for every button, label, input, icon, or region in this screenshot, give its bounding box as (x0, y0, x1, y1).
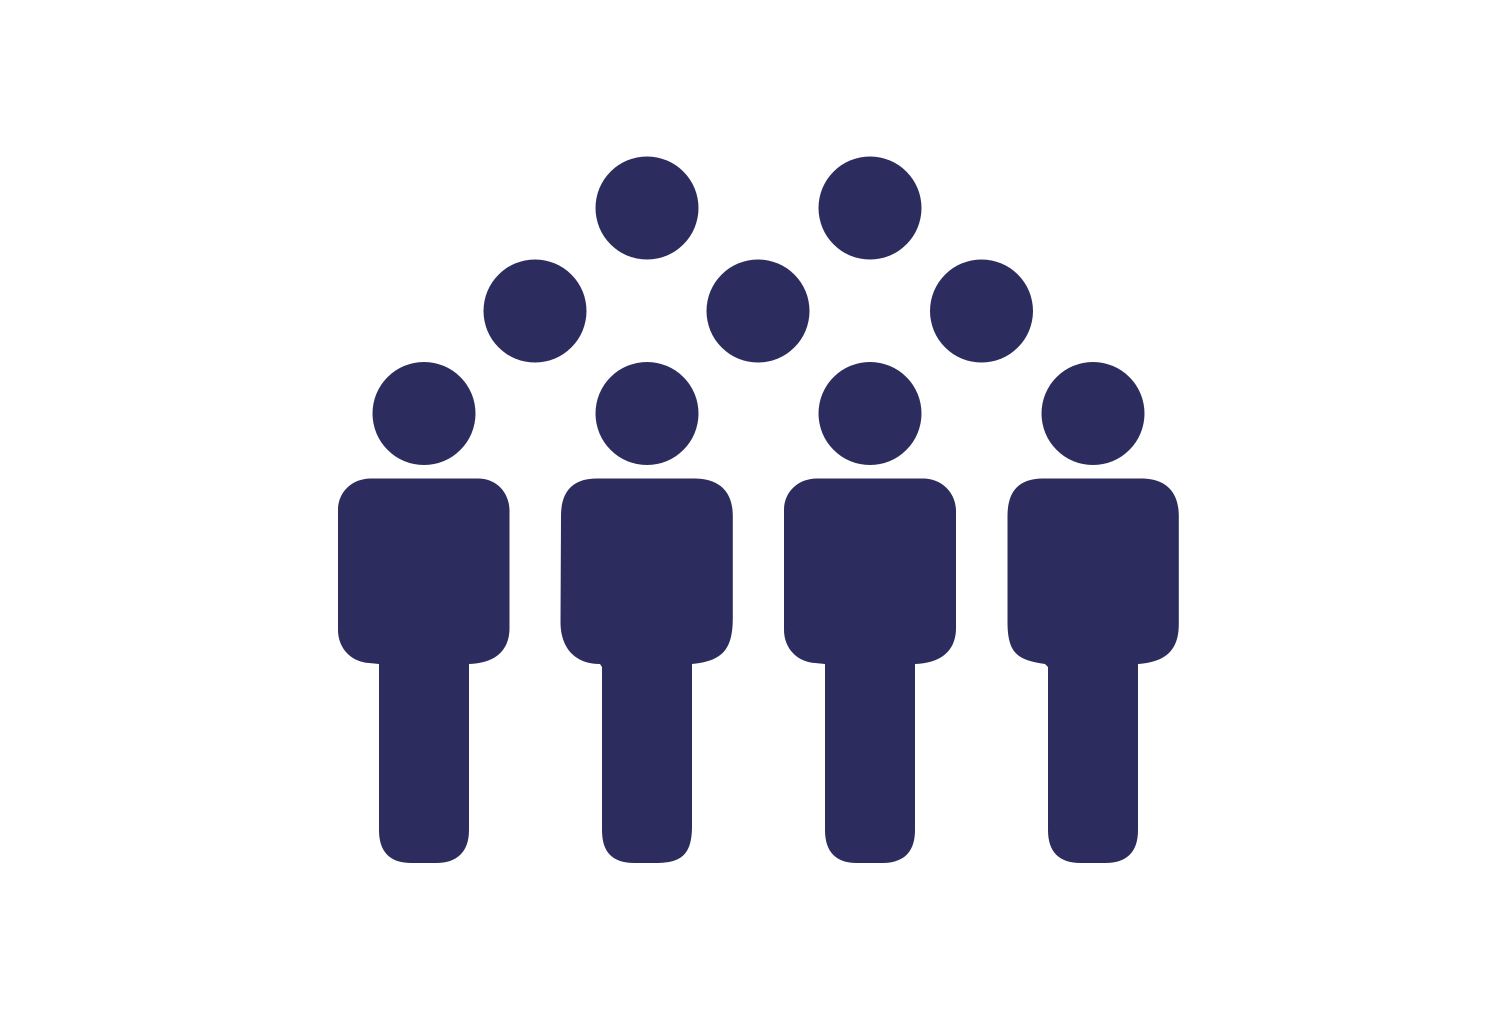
person 3 (784, 362, 956, 863)
person 1 (338, 362, 510, 863)
middle row head left (484, 260, 586, 362)
person 4 (1008, 362, 1179, 863)
middle row head center (706, 260, 810, 362)
middle row head right (930, 260, 1033, 362)
upper row head right (818, 156, 922, 260)
person 2 (560, 362, 733, 863)
upper row head left (596, 156, 698, 260)
